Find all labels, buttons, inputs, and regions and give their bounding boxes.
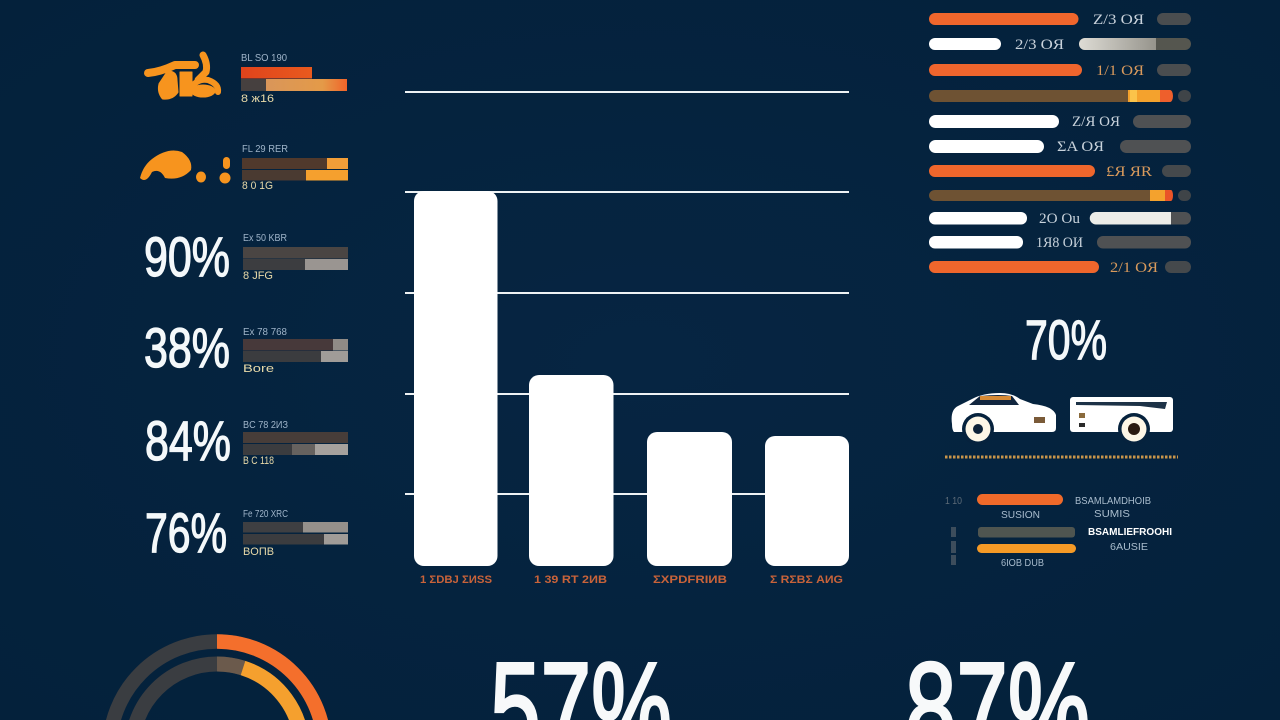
legend sub text 1: SUSION (1001, 510, 1040, 521)
legend text 2: BSAMLIEFROOHI (1088, 527, 1172, 538)
panel: right horizontal bars (929, 12, 1191, 276)
inner ring (132, 664, 302, 720)
axis label 3: ΣXΡDFRIИB (653, 574, 727, 586)
stat: 84%: 84% (145, 409, 231, 472)
row 3: 1/1 OЯ (1096, 63, 1144, 79)
row 1: Z/3 OЯ (1093, 12, 1144, 28)
stat: 90%: 90% (144, 225, 230, 288)
axis label 2: 1 39 RT 2ИB (534, 574, 607, 586)
stat: 38%: 38% (144, 316, 230, 379)
row 10 (929, 235, 1191, 251)
row 11 (929, 260, 1191, 276)
panel: legend (945, 494, 1172, 569)
row 5 (929, 114, 1191, 130)
stat: 70%: 70% (1025, 308, 1107, 371)
legend ticks (951, 527, 956, 565)
axis label 1: 1 ΣDBJ ΣИSS (420, 574, 492, 586)
bar 3 (647, 432, 732, 566)
row 5 label: BC 78 2ИЗ (243, 420, 288, 431)
row 11: 2/1 OЯ (1110, 260, 1158, 276)
bar 1 (414, 191, 498, 566)
legend text 1: BSAMLAMDHOIB (1075, 496, 1151, 507)
row 6: ΣΑ OЯ (1057, 139, 1104, 155)
outer ring (110, 642, 324, 720)
row 6 (929, 139, 1191, 155)
row 3 bars (243, 247, 348, 270)
legend text 3: 6AUSIE (1110, 542, 1148, 553)
row 2 bars (242, 158, 348, 180)
row 5 bars (243, 432, 348, 455)
row 1 value: 8 ж16 (241, 93, 274, 105)
row 10: 1Я8 OИ (1036, 235, 1083, 251)
panel: left stat rows (140, 53, 348, 564)
icon: white van (1070, 397, 1173, 445)
row 7: £Я ЯR (1106, 164, 1152, 180)
legend bar amber (977, 544, 1076, 553)
bar 2 (529, 375, 614, 566)
legend bar gray (978, 527, 1075, 538)
row 5: Z/Я OЯ (1072, 114, 1120, 130)
row 6 value: BOПB (243, 546, 274, 558)
bar 4 (765, 436, 849, 566)
row 9: 2O Ou (1039, 211, 1081, 227)
row 3 (929, 63, 1191, 79)
row 6 label: Fe 720 XRC (243, 509, 288, 520)
row 5 value: B C 118 (243, 455, 274, 467)
bar chart (405, 92, 849, 586)
stat: 76%: 76% (145, 501, 227, 564)
icon: white car (952, 393, 1056, 445)
legend tick label: 1 10 (945, 496, 962, 507)
row 4 (929, 90, 1191, 102)
row 3 value: 8 JFG (243, 270, 273, 282)
row 1 (929, 12, 1191, 28)
legend sub text 3: 6IOB DUB (1001, 558, 1044, 569)
legend sub text 2: SUMIS (1094, 509, 1130, 520)
row 4 bars (243, 339, 348, 362)
row 6 bars (243, 522, 348, 544)
row 8 (929, 190, 1191, 201)
dotted divider (945, 456, 1178, 458)
row 9 (929, 211, 1191, 227)
row 1 label: BL SO 190 (241, 53, 287, 64)
row 4 label: Ex 78 768 (243, 327, 287, 338)
row 2 label: FL 29 RER (242, 144, 288, 155)
legend bar orange (977, 494, 1063, 505)
row 2 (929, 37, 1191, 53)
row 1 bars (241, 67, 347, 91)
row 7 (929, 164, 1191, 180)
row 2 value: 8 0 1G (242, 180, 273, 192)
row 2: 2/3 OЯ (1015, 37, 1064, 53)
row 4 value: Bore (243, 363, 274, 375)
axis label 4: Σ RΣBΣ AИG (770, 574, 843, 586)
icon: orange splash two (140, 151, 230, 184)
donut chart (110, 642, 324, 720)
row 3 label: Ex 50 KBR (243, 233, 287, 244)
icon: orange splash one (148, 55, 218, 98)
